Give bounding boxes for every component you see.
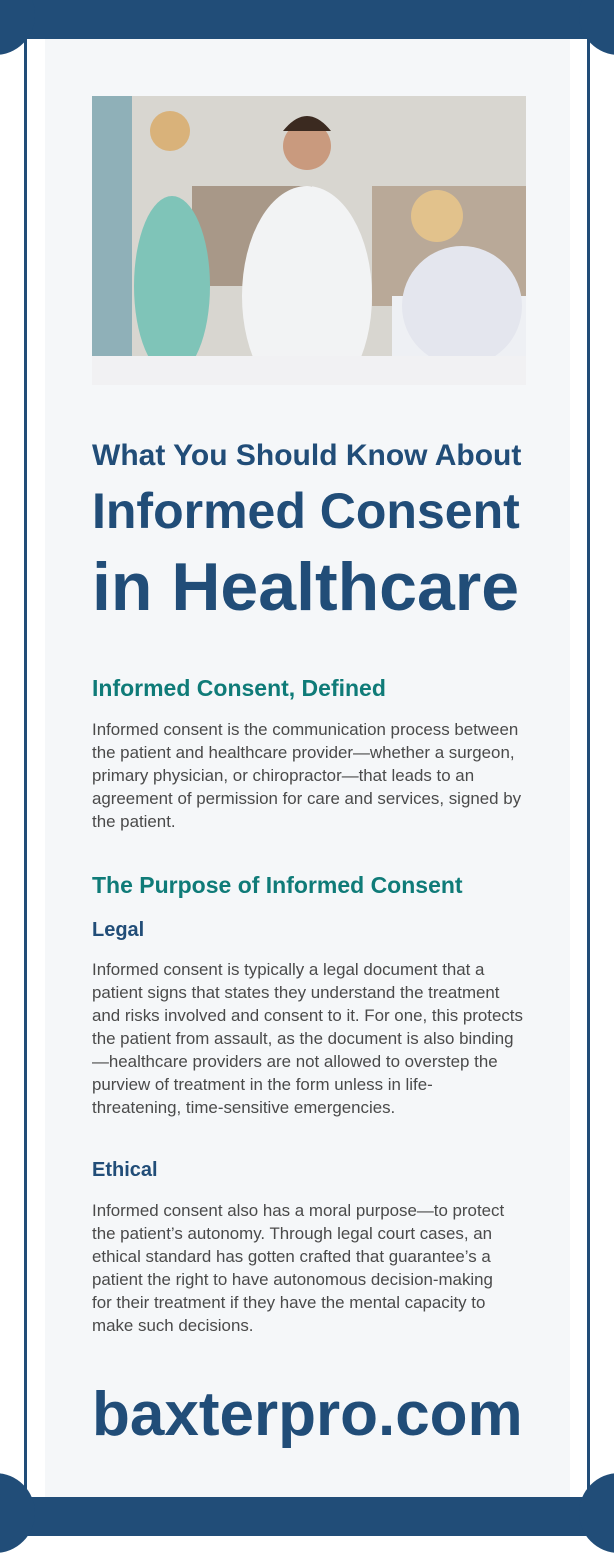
text: legal: threatening, time-sensitive emergencies. [92,1098,395,1117]
text: legal: and risks involved and consent to it. For one, this protects [92,1006,523,1025]
footer url: baxterpro.com [92,1380,523,1449]
text: definition: agreement of permission for care and services, signed by [92,789,521,808]
heading: defined: Informed Consent, Defined [92,675,386,701]
text: legal: the patient from assault, as the document is also binding [92,1029,514,1048]
text: ethical: ethical standard has gotten crafted that guarantee’s a [92,1247,491,1266]
text: ethical: for their treatment if they have the mental capacity to [92,1293,485,1312]
subheading: ethical: Ethical [92,1159,158,1181]
title: in Healthcare [92,549,519,625]
text: definition: the patient and healthcare provider—whether a surgeon, [92,743,515,762]
text: ethical: make such decisions. [92,1316,253,1335]
text: definition: Informed consent is the communication process between [92,720,518,739]
text: legal: —healthcare providers are not allowed to overstep the [92,1052,498,1071]
text: legal: patient signs that states they understand the treatment [92,983,500,1002]
heading: purpose: The Purpose of Informed Consent [92,872,463,898]
text: ethical: patient the right to have autonomous decision-making [92,1270,493,1289]
text: definition [92,720,521,831]
text: definition: primary physician, or chiropractor—that leads to an [92,766,474,785]
text: legal [92,960,523,1117]
text: legal: Informed consent is typically a legal document that a [92,960,484,979]
title [92,439,521,625]
text: ethical [92,1201,504,1335]
text: legal: purview of treatment in the form unless in life- [92,1075,433,1094]
text: ethical: Informed consent also has a moral purpose—to protect [92,1201,504,1220]
subheading: legal: Legal [92,919,144,941]
text: ethical: the patient’s autonomy. Through legal court cases, an [92,1224,492,1243]
title: What You Should Know About [92,439,521,472]
title: Informed Consent [92,483,520,539]
text: definition: the patient. [92,812,176,831]
photo: doctor with patient [92,96,526,356]
